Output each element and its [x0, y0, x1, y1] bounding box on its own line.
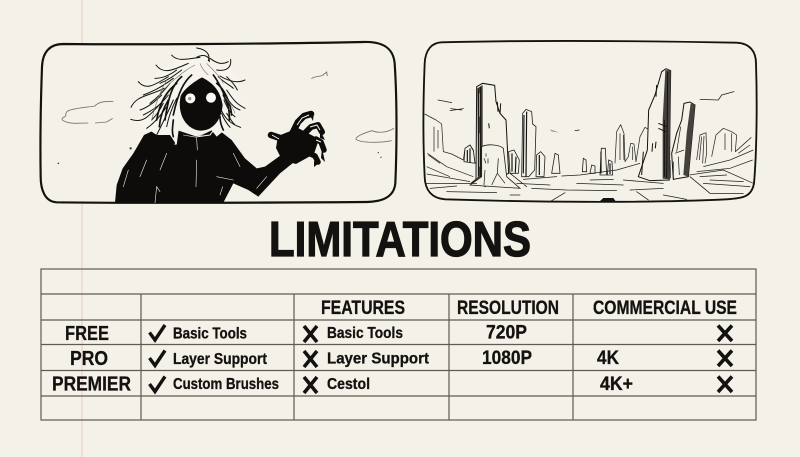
resolution values	[482, 322, 532, 369]
face	[180, 77, 223, 131]
eyes	[185, 93, 216, 103]
panel: creature illustration	[40, 42, 396, 203]
commercial use cross icons	[718, 326, 732, 392]
included features: Basic Tools	[173, 326, 247, 342]
left tower hatching	[472, 87, 501, 183]
included features: Custom Brushes	[173, 376, 279, 393]
excluded feature icons	[304, 326, 317, 393]
hair strands	[131, 48, 245, 135]
resolution values: 1080P	[482, 348, 532, 369]
plan names: FREE	[65, 322, 109, 345]
fingers	[271, 114, 324, 162]
column headers	[321, 298, 737, 319]
left tower	[476, 83, 509, 187]
right tower	[638, 69, 671, 181]
included features	[173, 326, 279, 393]
plan names: PRO	[70, 347, 108, 370]
far rock formations	[425, 114, 753, 183]
commercial use values	[597, 348, 633, 395]
panel frame	[40, 42, 396, 203]
comparison table	[41, 269, 756, 420]
plan names: PREMIER	[52, 372, 131, 396]
table grid	[41, 269, 756, 420]
commercial use values: 4K	[597, 348, 619, 369]
icon: clawed hand	[271, 112, 325, 167]
commercial use values: 4K+	[600, 374, 633, 395]
creature body	[115, 128, 313, 203]
resolution values: 720P	[486, 322, 527, 344]
hair mass	[132, 53, 245, 145]
excluded features	[327, 325, 430, 393]
ground lines	[427, 92, 750, 202]
tower shading	[467, 112, 610, 177]
clouds	[62, 72, 394, 142]
excluded features: Layer Support	[327, 350, 430, 368]
claws	[308, 112, 325, 167]
plan names	[52, 322, 131, 396]
included features: Layer Support	[173, 351, 267, 368]
excluded features: Cestol	[327, 376, 370, 393]
mid-left towers	[464, 109, 613, 177]
collar and neck strands	[175, 123, 215, 145]
rubble smudge	[599, 198, 616, 202]
panel frame	[423, 41, 757, 202]
column headers: FEATURES	[321, 298, 405, 319]
column headers: RESOLUTION	[457, 298, 559, 319]
jacket highlights	[123, 132, 267, 203]
right tower hatching	[642, 72, 668, 178]
far right tower	[672, 102, 695, 179]
column headers: COMMERCIAL USE	[593, 298, 737, 319]
finger highlights	[272, 115, 321, 142]
specks	[57, 147, 382, 164]
title: LIMITATIONS	[269, 213, 531, 267]
excluded features: Basic Tools	[327, 325, 403, 342]
panel: ruined city illustration	[423, 41, 757, 202]
check icons	[150, 325, 165, 392]
